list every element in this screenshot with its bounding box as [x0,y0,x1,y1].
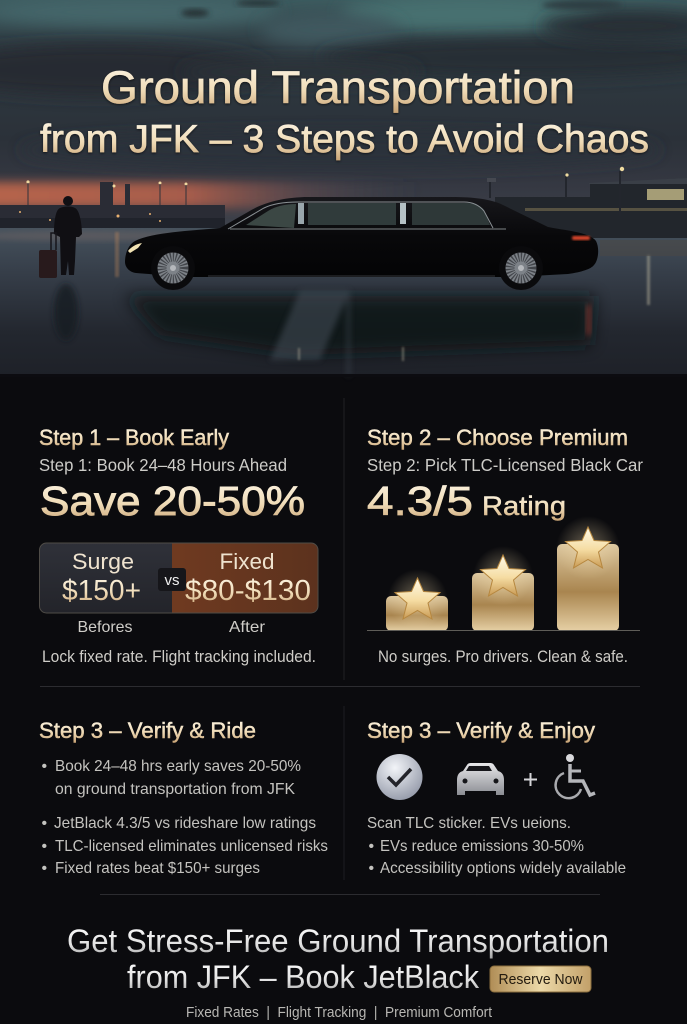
title [40,62,649,161]
headlight and taillight [128,243,142,253]
surge vs fixed comparison: $150+ [62,575,141,607]
step 2 caption: No surges. Pro drivers. Clean & safe. [378,648,628,666]
terminal building right [487,167,687,256]
feature list: Scan TLC sticker. EVs ueions. [367,815,571,832]
bullet list: • [42,860,47,877]
sky with storm clouds [0,0,687,232]
title: Ground Transportation [101,62,575,113]
headline: Get Stress-Free Ground Transportation [67,923,609,959]
reserve now button [490,966,591,992]
headline: from JFK – Book JetBlack [127,959,480,995]
icon: verified check [376,754,422,800]
title: from JFK – 3 Steps to Avoid Chaos [40,118,649,161]
distant skyline left [0,180,225,228]
step 2 heading: Step 2 – Choose Premium [367,425,628,450]
star two [473,546,533,606]
step 1 subheading: Step 1: Book 24–48 Hours Ahead [39,455,287,475]
star one [388,569,448,629]
traveler silhouette with suitcase [39,196,82,278]
step 1 heading: Step 1 – Book Early [39,425,229,450]
panel: step 2 choose premium [367,425,643,666]
limousine windows [228,202,506,229]
limousine [125,197,598,290]
panel: step 3 verify and enjoy [367,718,626,877]
surge vs fixed comparison: $80-$130 [185,575,311,607]
feature list: Accessibility options widely available [380,860,626,877]
star three [556,516,620,580]
after label: After [229,619,266,636]
step 2 subheading: Step 2: Pick TLC-Licensed Black Car [367,455,643,475]
headline [67,923,609,995]
bullet list: • [42,758,47,775]
icon: plus [524,773,537,786]
feature list: • [368,838,374,855]
rating stat: 4.3/5 [367,478,473,524]
panel: step 1 book early [39,425,318,666]
vs badge [158,568,186,591]
before label: Befores [78,619,132,636]
surge vs fixed comparison [40,543,318,613]
hero photo: limousine at JFK at dusk [0,0,687,377]
footer features: Fixed Rates | Flight Tracking | Premium Comfort [186,1005,492,1021]
feature list [367,815,626,877]
bullet list: • [42,815,47,832]
reserve now button: Reserve Now [498,971,583,988]
icon: wheelchair accessibility [556,754,595,798]
panel: step 3 verify and ride [39,718,328,877]
step 1 caption: Lock fixed rate. Flight tracking included. [42,648,316,666]
bullet list: • [42,838,47,855]
rating stat: Rating [482,491,566,521]
rear wheel [499,246,543,290]
bullet list: TLC-licensed eliminates unlicensed risks [55,838,328,855]
icon: electric car [457,763,504,795]
bullet list: on ground transportation from JFK [55,781,295,798]
front wheel [151,246,195,290]
feature list: EVs reduce emissions 30-50% [380,838,584,855]
vs badge: vs [164,572,180,589]
star bar chart [367,516,640,631]
call to action [67,923,609,1021]
surge vs fixed comparison: Fixed [220,549,274,574]
bullet list: Fixed rates beat $150+ surges [55,860,260,877]
bullet list [42,758,328,877]
heading: Step 3 – Verify & Ride [39,718,256,743]
savings stat: Save 20-50% [40,478,305,524]
feature list: • [368,860,374,877]
heading: Step 3 – Verify & Enjoy [367,718,595,743]
rating stat [367,478,566,524]
wet tarmac [0,228,687,377]
bullet list: Book 24–48 hrs early saves 20-50% [55,758,301,775]
bullet list: JetBlack 4.3/5 vs rideshare low ratings [54,815,316,832]
surge vs fixed comparison: Surge [72,549,134,574]
